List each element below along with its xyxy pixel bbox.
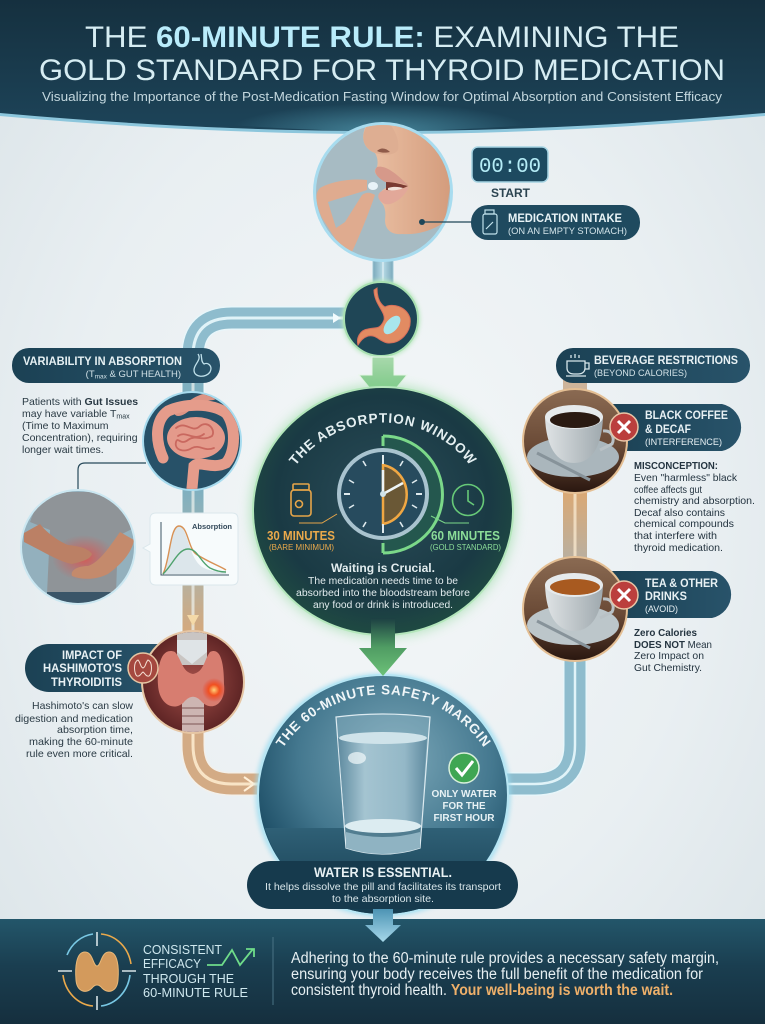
stomach circle	[342, 280, 420, 358]
tea pill: TEA & OTHER	[645, 576, 718, 590]
variability paragraph: may have variable T	[22, 408, 116, 420]
clock dial	[339, 436, 442, 553]
leader: 30 minutes	[299, 514, 337, 523]
icon: trend arrow	[207, 949, 254, 965]
only water text: FOR THE	[442, 801, 486, 812]
green arrow to safety margin	[359, 618, 407, 676]
consistent efficacy label: CONSISTENT	[143, 942, 222, 957]
variability pill: max	[95, 374, 108, 380]
footer paragraph: Adhering to the 60-minute rule provides a necessary safety margin,	[291, 950, 719, 967]
beverage pill: (BEYOND CALORIES)	[594, 368, 687, 379]
subtitle: Visualizing the Importance of the Post-Medication Fasting Window for Optimal Absorption and Consistent Efficacy	[42, 89, 723, 104]
header banner	[0, 0, 765, 134]
icon: water glass	[336, 714, 430, 854]
heading: the absorption window: THE ABSORPTION WINDOW	[288, 413, 477, 464]
coffee cup circle	[522, 388, 628, 494]
panel: hashimoto's	[15, 630, 245, 760]
icon: check	[449, 753, 479, 783]
panel: absorption window	[244, 380, 522, 643]
hashimoto pill	[25, 644, 160, 692]
zero calories paragraph	[634, 628, 712, 674]
pipe: intake to stomach	[372, 255, 394, 290]
hashimoto paragraph: digestion and medication	[15, 713, 133, 725]
zero calories paragraph: Gut Chemistry.	[634, 663, 702, 674]
variability paragraph: longer wait times.	[22, 444, 104, 456]
medication intake pill	[471, 205, 640, 240]
medication intake pill: (ON AN EMPTY STOMACH)	[508, 226, 627, 237]
hashimoto paragraph: making the 60-minute	[29, 736, 133, 748]
x badge: coffee	[610, 413, 638, 441]
heading: safety margin: THE 60-MINUTE SAFETY MARGIN	[275, 684, 491, 747]
x badge: tea	[610, 581, 638, 609]
black coffee pill: (INTERFERENCE)	[645, 437, 722, 448]
water pill	[247, 861, 518, 909]
pipe: right column lower	[505, 655, 575, 784]
start label: START	[491, 188, 530, 200]
beverage pill: BEVERAGE RESTRICTIONS	[594, 353, 738, 367]
label: 30 minutes: 30 MINUTES	[267, 529, 335, 543]
title: GOLD STANDARD FOR THYROID MEDICATION	[39, 54, 725, 87]
label: 30 minutes	[267, 529, 335, 552]
thyroid circle	[141, 630, 245, 735]
variability pill: (T	[86, 369, 95, 380]
misconception paragraph: MISCONCEPTION:	[634, 461, 718, 472]
footer paragraph: consistent thyroid health. Your well-being is worth the wait.	[291, 982, 673, 999]
tea pill: DRINKS	[645, 589, 687, 603]
waiting text: The medication needs time to be	[308, 576, 459, 587]
variability paragraph: Concentration), requiring	[22, 432, 138, 444]
icon: clock	[452, 484, 484, 516]
footer band	[0, 919, 765, 1024]
green arrow to absorption window	[359, 357, 407, 404]
pipe: right column upper	[563, 380, 587, 395]
misconception paragraph: Even "harmless" black	[634, 473, 738, 484]
footer paragraph	[291, 950, 719, 999]
consistent efficacy label: 60-MINUTE RULE	[143, 985, 248, 1000]
label: 60 minutes: 60 MINUTES	[431, 529, 500, 543]
misconception paragraph: chemistry and absorption.	[634, 496, 755, 507]
variability paragraph: (Time to Maximum	[22, 420, 109, 432]
water pill: It helps dissolve the pill and facilitates its transport	[265, 882, 501, 893]
timer display	[472, 147, 548, 182]
pipe: thyroid to water	[193, 728, 262, 791]
timer display: 00:00	[479, 156, 541, 179]
misconception paragraph: chemical compounds	[634, 519, 734, 530]
hashimoto pill: THYROIDITIS	[51, 675, 122, 689]
callout dot and line	[419, 219, 425, 225]
zero calories paragraph: DOES NOT Mean	[634, 640, 712, 651]
flow pipes	[181, 255, 587, 791]
variability paragraph	[22, 396, 138, 456]
hashimoto paragraph: rule even more critical.	[26, 748, 133, 760]
label: 60 minutes	[430, 529, 501, 552]
hashimoto pill: HASHIMOTO'S	[43, 661, 122, 675]
waiting text: any food or drink is introduced.	[313, 600, 453, 611]
waiting text: absorbed into the bloodstream before	[296, 588, 471, 599]
waiting text: Waiting is Crucial.	[331, 561, 435, 575]
panel: variability in absorption	[12, 348, 242, 608]
black coffee pill: & DECAF	[645, 422, 691, 436]
medication intake pill: MEDICATION INTAKE	[508, 213, 622, 225]
consistent efficacy label: EFFICACY	[143, 956, 201, 971]
icon: bottle	[291, 484, 311, 516]
man holding stomach photo	[20, 489, 136, 608]
variability pill: VARIABILITY IN ABSORPTION	[23, 354, 182, 368]
leader: 60 minutes	[431, 516, 469, 523]
misconception paragraph: Decaf also contains	[634, 508, 725, 519]
zero calories paragraph: Zero Impact on	[634, 651, 704, 662]
arrowhead on left column	[187, 615, 199, 626]
black coffee pill	[605, 404, 741, 451]
tea cup circle	[522, 556, 628, 662]
water pill: WATER IS ESSENTIAL.	[314, 865, 452, 880]
only water text	[432, 789, 497, 824]
hashimoto paragraph: Hashimoto's can slow	[32, 700, 133, 712]
only water text: ONLY WATER	[432, 789, 497, 800]
thyroid target icon	[58, 932, 136, 1010]
misconception paragraph: that interfere with	[634, 531, 717, 542]
misconception paragraph: thyroid medication.	[634, 543, 723, 554]
label: 60 minutes: (GOLD STANDARD)	[430, 543, 501, 552]
misconception paragraph: coffee affects gut	[634, 485, 702, 496]
intake photo circle	[313, 120, 472, 262]
zero calories paragraph: Zero Calories	[634, 628, 697, 639]
small thyroid icon badge	[128, 653, 158, 683]
variability pill	[12, 348, 220, 383]
tea pill	[605, 571, 731, 618]
title	[39, 21, 725, 87]
beverage pill	[556, 348, 750, 383]
hashimoto paragraph	[15, 700, 133, 760]
misconception paragraph	[634, 461, 755, 554]
icon: bottle	[483, 210, 497, 234]
absorption chart card: Absorption	[192, 522, 232, 531]
footer paragraph: ensuring your body receives the full benefit of the medication for	[291, 966, 703, 983]
intestine circle	[142, 391, 242, 491]
connector line	[78, 463, 146, 492]
pipe: stomach to left column	[193, 313, 350, 356]
blue arrow to footer	[365, 909, 401, 942]
black coffee pill: BLACK COFFEE	[645, 408, 728, 422]
tea pill: (AVOID)	[645, 604, 678, 615]
panel: beverage restrictions	[522, 348, 755, 674]
waiting text	[296, 561, 471, 611]
consistent efficacy label: THROUGH THE	[143, 971, 234, 986]
variability pill: & GUT HEALTH)	[107, 369, 181, 380]
only water text: FIRST HOUR	[434, 813, 495, 824]
title: THE 60-MINUTE RULE: EXAMINING THE	[85, 21, 679, 54]
label: 30 minutes: (BARE MINIMUM)	[269, 543, 334, 552]
hashimoto paragraph: absorption time,	[57, 724, 133, 736]
panel: safety margin	[252, 671, 513, 919]
consistent efficacy label	[143, 942, 248, 1000]
absorption chart card	[143, 513, 238, 585]
variability paragraph: Patients with Gut Issues	[22, 396, 138, 408]
hashimoto pill: IMPACT OF	[62, 648, 122, 662]
variability paragraph: max	[116, 414, 130, 420]
water pill: to the absorption site.	[332, 894, 434, 905]
pipe: left column	[181, 380, 205, 640]
